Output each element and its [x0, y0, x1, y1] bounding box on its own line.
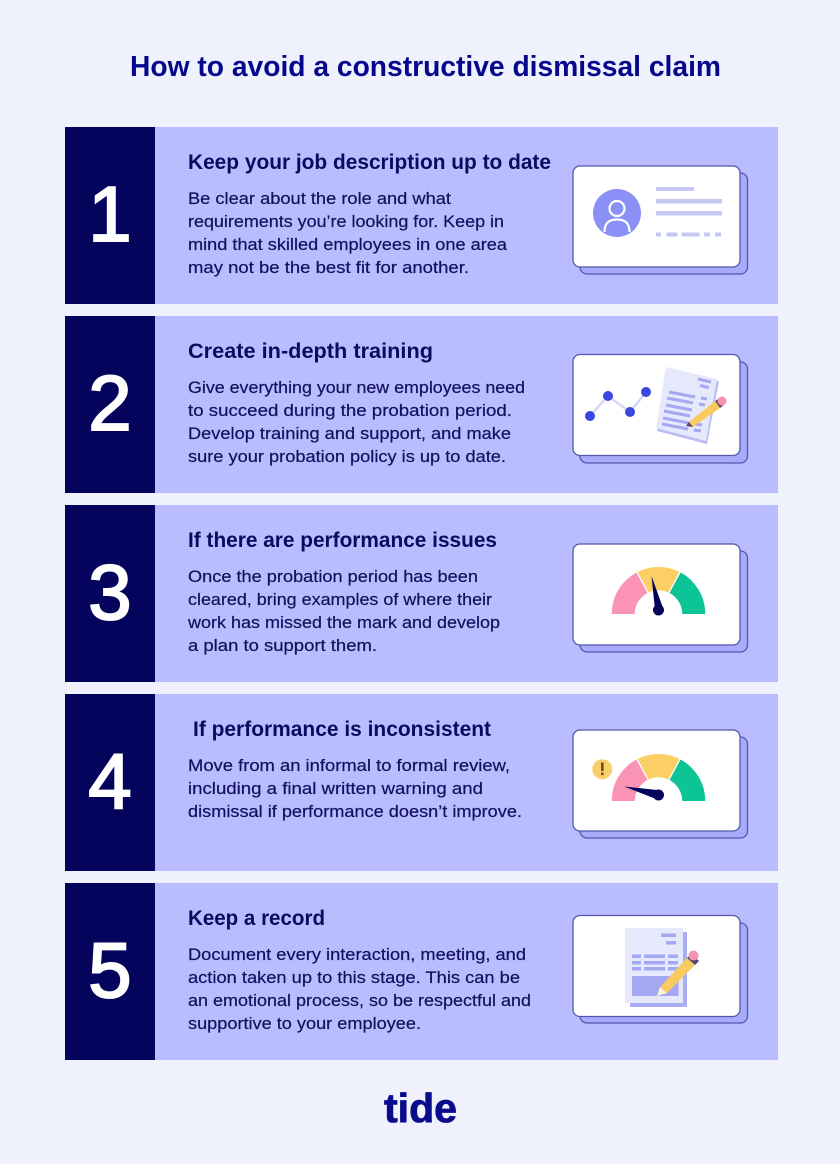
- number block 2: [65, 316, 155, 493]
- number block 2: 2: [88, 359, 132, 447]
- panel: step 1: [65, 127, 778, 304]
- body text 4: dismissal if performance doesn’t improve.: [188, 802, 522, 821]
- panel: step 4: [65, 694, 778, 871]
- number block 1: 1: [88, 170, 132, 258]
- body text 1: requirements you’re looking for. Keep in: [188, 212, 504, 231]
- body text 4: including a final written warning and: [188, 779, 483, 798]
- body text 2: [188, 378, 525, 466]
- heading 3: If there are performance issues: [188, 529, 497, 552]
- icon: chart and document: [573, 354, 748, 463]
- body text 3: cleared, bring examples of where their: [188, 590, 492, 609]
- icon: gauge low with alert: [573, 730, 748, 838]
- panel: step 5: [65, 883, 778, 1060]
- icon: gauge mid: [573, 544, 748, 652]
- body text 4: Move from an informal to formal review,: [188, 756, 510, 775]
- number block 5: 5: [88, 926, 132, 1014]
- panel: step 2: [65, 316, 778, 493]
- body text 5: an emotional process, so be respectful and: [188, 991, 531, 1010]
- body text 2: to succeed during the probation period.: [188, 401, 512, 420]
- number block 3: [65, 505, 155, 682]
- number block 4: 4: [88, 737, 132, 825]
- icon: document and pencil: [573, 916, 748, 1023]
- body text 1: [188, 189, 508, 277]
- body text 4: [188, 756, 522, 821]
- body text 5: action taken up to this stage. This can be: [188, 968, 520, 987]
- body text 3: work has missed the mark and develop: [187, 613, 500, 632]
- body text 3: Once the probation period has been: [188, 567, 478, 586]
- body text 3: a plan to support them.: [188, 636, 377, 655]
- number block 5: [65, 883, 155, 1060]
- body text 2: Develop training and support, and make: [188, 424, 511, 443]
- body text 1: may not be the best fit for another.: [188, 258, 469, 277]
- logo: tide: tide: [384, 1085, 457, 1131]
- body text 2: sure your probation policy is up to date.: [188, 447, 506, 466]
- body text 3: [187, 567, 500, 655]
- heading 2: Create in-depth training: [188, 340, 433, 363]
- number block 3: 3: [88, 548, 132, 636]
- heading 4: If performance is inconsistent: [193, 718, 491, 741]
- body text 1: Be clear about the role and what: [188, 189, 451, 208]
- body text 5: supportive to your employee.: [188, 1014, 421, 1033]
- number block 1: [65, 127, 155, 304]
- number block 4: [65, 694, 155, 871]
- body text 5: [188, 945, 531, 1033]
- heading 5: Keep a record: [188, 907, 325, 930]
- title: How to avoid a constructive dismissal claim: [130, 51, 721, 83]
- panel: step 3: [65, 505, 778, 682]
- body text 1: mind that skilled employees in one area: [188, 235, 508, 254]
- body text 5: Document every interaction, meeting, and: [188, 945, 526, 964]
- icon: profile card: [573, 166, 748, 274]
- body text 2: Give everything your new employees need: [188, 378, 525, 397]
- heading 1: Keep your job description up to date: [188, 151, 551, 174]
